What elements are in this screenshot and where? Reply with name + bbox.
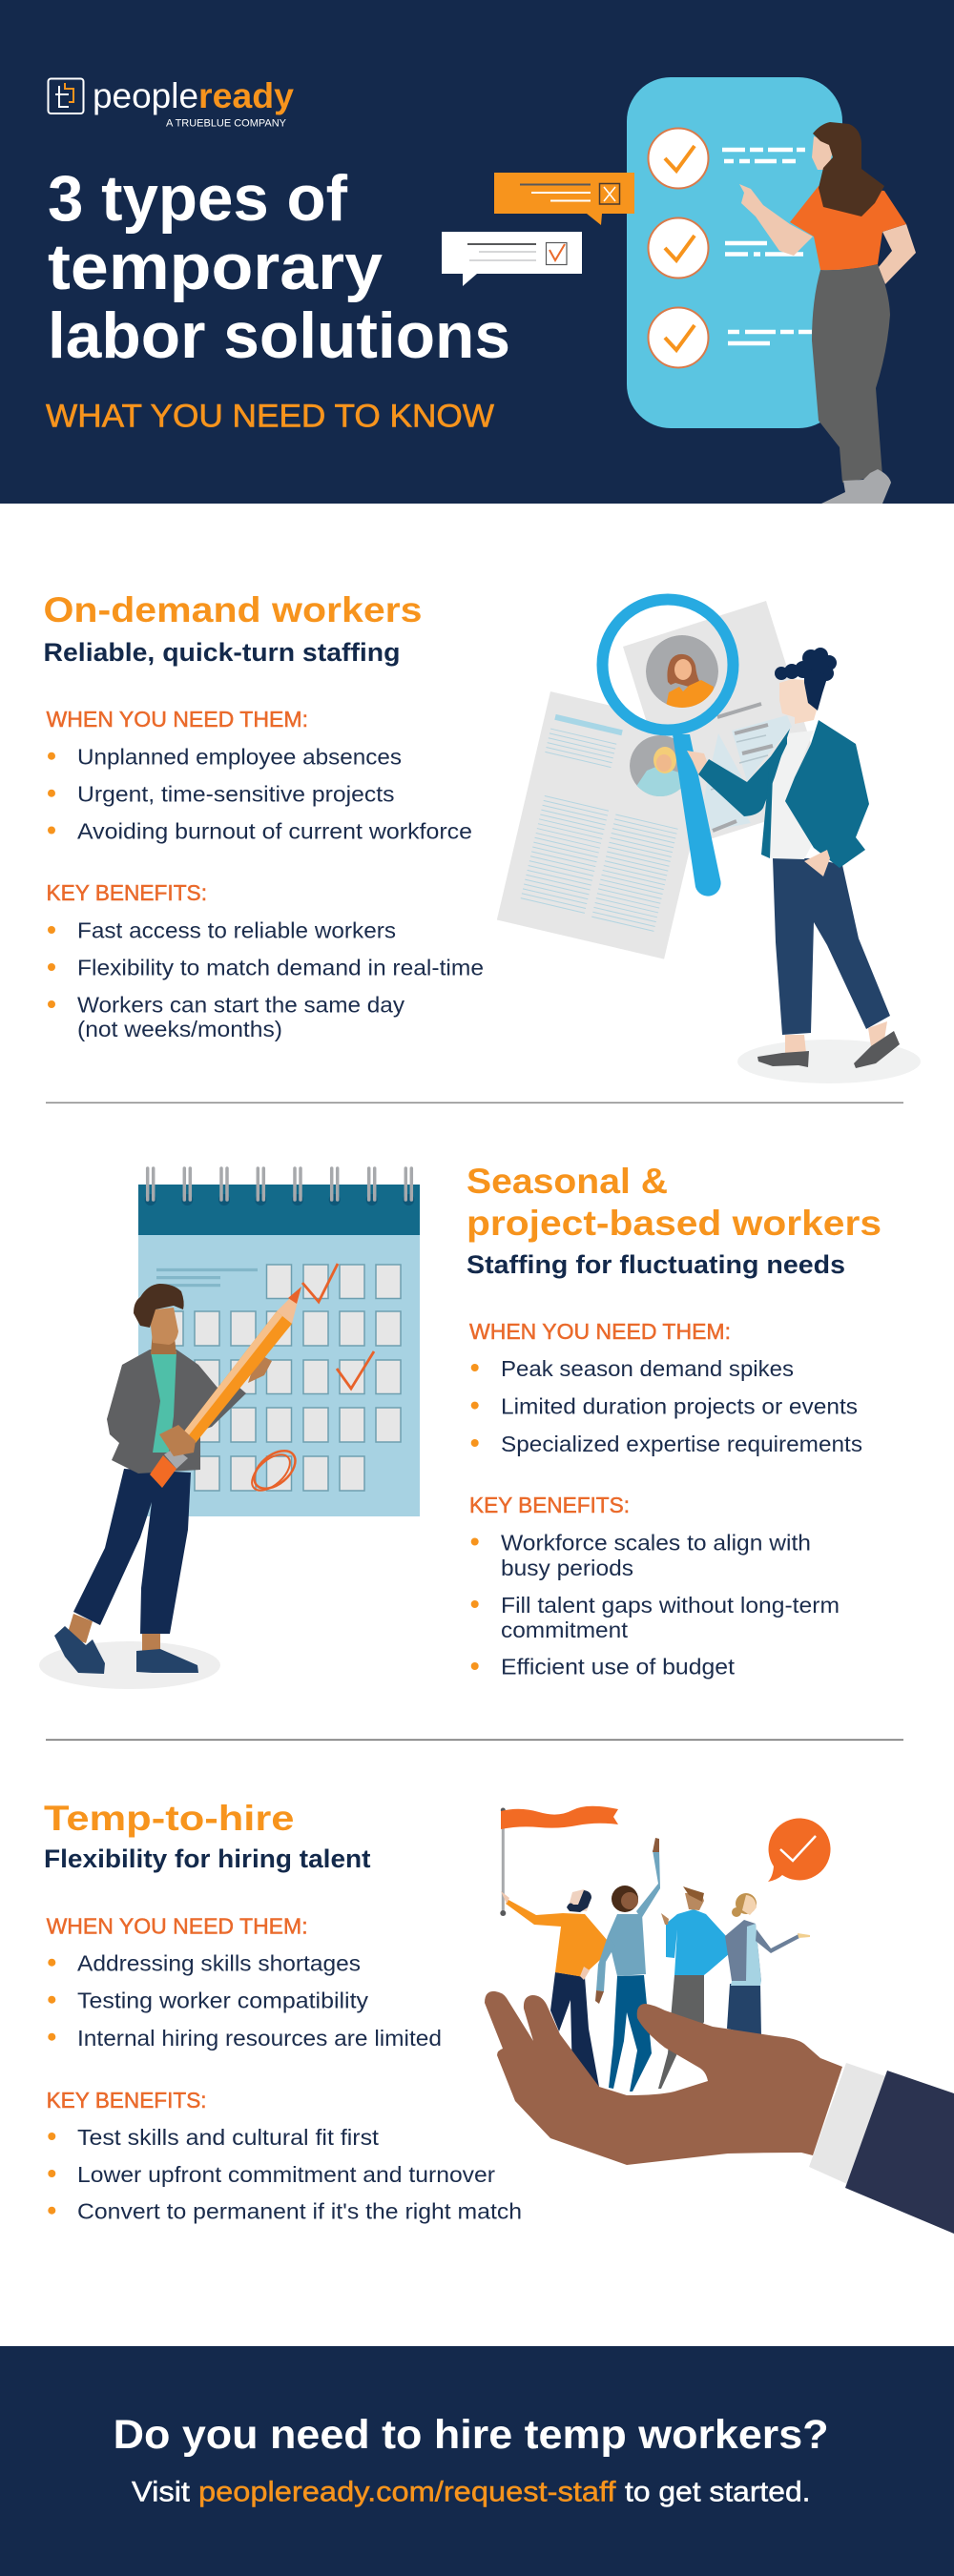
list: when you need them: Internal hiring resources are limited [77, 2026, 442, 2050]
list: key benefits: commitment [501, 1618, 628, 1642]
subtitle: WHAT YOU NEED TO KNOW [46, 399, 494, 435]
logo: peopleready: ready [198, 76, 294, 115]
woman in teal blazer [687, 648, 900, 1068]
list: when you need them: Specialized expertise requirements [501, 1432, 862, 1456]
logo: peopleready [48, 76, 294, 130]
list: key benefits [46, 880, 484, 1041]
title: temporary [48, 231, 383, 303]
magnifier lens [597, 593, 738, 896]
list: when you need them: Peak season demand spikes [501, 1356, 794, 1381]
list: key benefits [469, 1493, 840, 1680]
heading: project-based workers [467, 1204, 881, 1243]
call to action link line [132, 2477, 811, 2508]
icon: check circle 2 [649, 217, 708, 278]
flag [500, 1806, 618, 1916]
woman pointing at checklist [739, 122, 916, 504]
title [48, 162, 510, 372]
list: when you need them [46, 707, 472, 843]
list: key benefits: Convert to permanent if it's the right match [77, 2199, 522, 2224]
magnifier handle [673, 734, 721, 896]
illustration: man marking calendar [39, 1168, 420, 1689]
checklist panel [627, 77, 842, 428]
divider [46, 1740, 903, 1741]
list: when you need them: WHEN YOU NEED THEM: [469, 1319, 731, 1344]
list: when you need them: Addressing skills shortages [77, 1951, 361, 1976]
call to action link line: to get started. [625, 2477, 811, 2508]
logo: peopleready: people [93, 76, 198, 115]
list: key benefits: KEY BENEFITS: [469, 1493, 630, 1517]
list: when you need them: Unplanned employee absences [77, 745, 402, 770]
suit sleeve [845, 2071, 954, 2234]
call to action heading: Do you need to hire temp workers? [114, 2412, 829, 2458]
list: when you need them: Limited duration projects or events [501, 1394, 858, 1419]
orange speech bubble [494, 173, 634, 225]
heading [467, 1162, 881, 1243]
footer banner [0, 2346, 954, 2576]
list: key benefits: Fast access to reliable workers [77, 917, 396, 942]
call to action link line: peopleready.com/request-staff [198, 2477, 616, 2508]
heading: Seasonal & [467, 1162, 668, 1201]
photo: blonde worker [630, 735, 681, 796]
section: temp-to-hire text [44, 1799, 522, 2224]
illustration: woman with magnifier and resumes [497, 599, 921, 1083]
person: teal sweater waving [595, 1838, 660, 2092]
calendar [138, 1168, 420, 1516]
section: seasonal and project-based workers text [467, 1162, 881, 1680]
floor shadow [39, 1641, 220, 1689]
list: when you need them: WHEN YOU NEED THEM: [47, 1914, 308, 1939]
list: when you need them: WHEN YOU NEED THEM: [46, 707, 308, 732]
list: when you need them [47, 1914, 442, 2050]
man holding pencil [54, 1284, 301, 1674]
call to action link line: Visit [132, 2477, 191, 2508]
list: key benefits: Fill talent gaps without long-term [501, 1593, 840, 1618]
list: key benefits: busy periods [501, 1556, 633, 1580]
icon: check circle 3 [649, 307, 708, 368]
section: on-demand workers text [44, 590, 484, 1041]
list: key benefits: Lower upfront commitment and turnover [77, 2162, 495, 2187]
hand [485, 1991, 842, 2165]
list: key benefits: Test skills and cultural fit first [77, 2125, 379, 2150]
person: grey jacket [725, 1893, 810, 2036]
list: key benefits: Workers can start the same day [77, 993, 404, 1018]
list: when you need them [469, 1319, 862, 1456]
list: key benefits: KEY BENEFITS: [46, 880, 207, 905]
icon: check circle 1 [649, 128, 708, 189]
title: labor solutions [48, 299, 510, 372]
list: key benefits: KEY BENEFITS: [47, 2088, 207, 2112]
person: orange sweater with flag [501, 1889, 613, 2087]
illustration: team standing on a hand [485, 1806, 954, 2234]
icon: check speech bubble [768, 1818, 831, 1882]
subheading: Reliable, quick-turn staffing [44, 638, 400, 667]
heading: On-demand workers [44, 590, 422, 629]
front resume [497, 691, 717, 959]
header banner [0, 0, 954, 504]
rear resume [623, 601, 829, 847]
list: key benefits: Flexibility to match demand in real-time [77, 956, 484, 980]
white speech bubble [442, 232, 582, 286]
list: key benefits: Workforce scales to align with [501, 1531, 811, 1556]
list: when you need them: Testing worker compatibility [77, 1989, 368, 2013]
person: blue sweater [658, 1886, 736, 2089]
heading: Temp-to-hire [44, 1799, 294, 1838]
list: key benefits: Efficient use of budget [501, 1655, 735, 1680]
list: key benefits: (not weeks/months) [77, 1017, 282, 1041]
pencil [150, 1287, 301, 1488]
photo: enlarged worker [646, 635, 718, 711]
title: 3 types of [48, 162, 347, 235]
list: key benefits [47, 2088, 522, 2224]
subheading: Staffing for fluctuating needs [467, 1250, 845, 1279]
list: when you need them: Urgent, time-sensitive projects [77, 782, 395, 807]
subheading: Flexibility for hiring talent [44, 1844, 371, 1873]
floor shadow [737, 1040, 921, 1083]
logo: peopleready: A TRUEBLUE COMPANY [166, 118, 287, 130]
shirt cuff [809, 2063, 885, 2184]
list: when you need them: Avoiding burnout of current workforce [77, 818, 472, 843]
